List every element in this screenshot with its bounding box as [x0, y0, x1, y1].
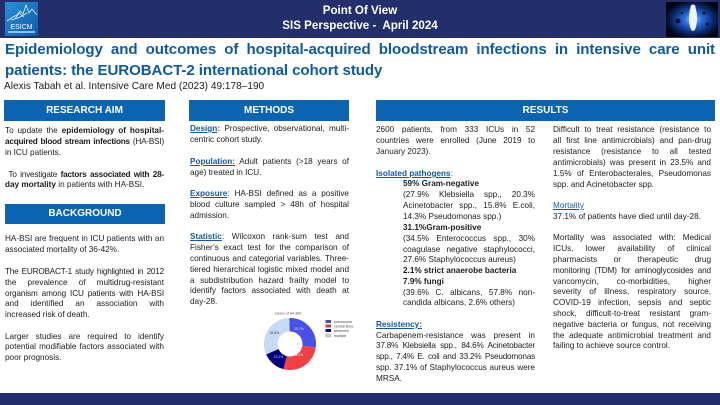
text: background: potential modifiable factors associated with	[5, 342, 164, 351]
text: results right column: 37.1% of patients have died until day-28.	[553, 212, 701, 221]
text: results left column: 37.8% Klebsiella spp., 84.6% Acinetobacter	[376, 341, 535, 350]
chart legend	[326, 320, 353, 338]
text: results left column: candida albicans, 2.6% others)	[403, 298, 515, 307]
header band	[0, 0, 720, 38]
icon: ESICM logo	[5, 2, 38, 36]
text: results right column: Mortality	[553, 201, 584, 210]
icon: glowing human figure image	[666, 2, 718, 37]
heading: background	[5, 204, 165, 224]
text: background: and identified an association with	[5, 299, 164, 308]
text: research aim: To update the epidemiology of hospital-	[5, 126, 164, 135]
heading: methods: METHODS	[244, 105, 294, 116]
text: background: increased risk of death.	[5, 310, 90, 319]
text: results left column: Carbapenem-resistance was present in	[376, 331, 535, 340]
text: results left column: January 2023).	[376, 147, 431, 156]
text: background: HA-BSI are frequent in ICU patients with an	[5, 234, 164, 243]
chart: donut source of HA-BSI: 32.8%	[270, 331, 279, 335]
text: results right column: COVID-19 infection, sepsis and septic	[553, 298, 711, 307]
header title: Point Of View	[323, 4, 397, 17]
chart: donut source of HA-BSI: 15.1%	[274, 355, 283, 359]
text: results right column: shock, difficult-to-treat resistant gram-	[553, 309, 711, 318]
text: results left column: 2.1% strict anaerobe bacteria	[403, 266, 516, 275]
text: results right column: antimicrobials) was present in 23.5% and	[553, 158, 711, 167]
text: results right column: negative bacteria or fungus, not receiving	[553, 320, 711, 329]
text: results right column: failing to achieve source control.	[553, 341, 670, 350]
text: results right column: monitoring (TDM) for aminoglycosides and	[553, 266, 711, 275]
text: results right column: vancomycin, co-morbidities, higher	[553, 277, 711, 286]
text: methods: Statistic: Wilcoxon rank-sum test and	[190, 232, 349, 241]
text: background: The EUROBACT-1 study highlighted in 2012	[5, 267, 164, 276]
text: methods: blood culture sampled > 48h of hospital	[190, 200, 349, 209]
icon: ESICM logo: ESICM	[10, 24, 33, 31]
text: methods	[190, 124, 350, 306]
text: results right column: Mortality was associated with: Medical	[553, 233, 711, 242]
text: results right column: spp. and Acinetobacter spp.	[553, 180, 654, 188]
heading: results	[376, 100, 715, 121]
text: background	[5, 234, 164, 362]
text: results left column: 31.1%Gram-positive	[403, 223, 481, 232]
text: methods: age) treated in ICU.	[190, 168, 261, 177]
text: methods: tiered hierarchical logistic mixed model and	[190, 265, 349, 274]
text: methods: continuous and categorial variables. Three-	[190, 254, 349, 263]
text: results right column: all first line antimicrobials) and pan-drug	[553, 136, 711, 145]
text: methods: Design: Prospective, observational, multi-	[190, 124, 349, 133]
text: results right column: 1.5% of Enterobacterales, Pseudomonas	[553, 169, 711, 178]
text: research aim: To investigate factors associated with 28-	[8, 170, 164, 179]
chart title: source of HA-BSI	[275, 312, 301, 316]
text: background: poor prognosis.	[5, 353, 61, 362]
text: results left column: spp., 7.4% E. coli and 33.2% Pseudomonas	[376, 352, 535, 361]
header title	[282, 4, 438, 32]
text: research aim: in ICU patients.	[5, 148, 61, 157]
text: results right column: the adequate antimicrobial treatment and	[553, 331, 711, 340]
heading: background: BACKGROUND	[48, 208, 122, 219]
text: background: Larger studies are required to identify	[5, 332, 164, 341]
text: results left column: spp. 37.1% of Staphylococcus aureus were	[376, 363, 535, 372]
chart legend: abdomen	[334, 329, 349, 333]
heading: research aim: RESEARCH AIM	[46, 105, 123, 116]
text: results right column: pharmacists or therapeutic drug	[553, 255, 711, 264]
text: results left column: 59% Gram-negative	[403, 179, 479, 188]
text: research aim: day mortality in patients with HA-BSI.	[5, 180, 144, 189]
text: results left column: (34.5% Enterococcus spp., 30%	[403, 234, 535, 243]
text: results right column	[553, 125, 711, 350]
chart: donut source of HA-BSI	[264, 312, 353, 370]
chart legend: multiple	[334, 334, 346, 338]
text: background: organism among ICU patients with HA-BSI	[5, 288, 164, 298]
chart legend: pneumonia	[334, 320, 352, 324]
heading: results: RESULTS	[523, 105, 568, 116]
text: methods: identify factors associated with death at	[190, 286, 349, 295]
text: results left column: 2600 patients, from 333 ICUs in 52	[376, 125, 535, 134]
text: background: associated mortality of 36-42%.	[5, 245, 119, 254]
text: results left column: Isolated pathogens:	[376, 169, 453, 178]
chart legend: central lines	[334, 324, 353, 328]
header title: SIS Perspective - April 2024	[282, 19, 438, 32]
text: results left column: MRSA.	[376, 374, 402, 383]
text: results left column: coagulase negative staphylococci,	[403, 245, 535, 254]
text: results right column: Difficult to treat resistance (resistance to	[553, 125, 711, 134]
chart: donut source of HA-BSI: 28.7%	[294, 327, 304, 331]
paper title	[5, 41, 715, 79]
text: methods: centric cohort study.	[190, 135, 263, 144]
text: results left column: Acinetobacter spp., 15.8% E.coli,	[403, 201, 535, 210]
heading: research aim	[4, 100, 165, 121]
text: results right column: resistance (resistance to all tested	[553, 147, 711, 156]
text: methods: admission.	[190, 211, 229, 220]
text: methods: day-28.	[190, 297, 217, 306]
text: methods: Population: Adult patients (>18 years of	[190, 157, 349, 166]
text: results left column: countries were enrolled (June 2019 to	[376, 136, 535, 145]
text: results left column	[376, 125, 536, 383]
text: research aim: acquired blood stream infections (HA-BSI)	[5, 137, 164, 146]
text: background: the prevalence of multidrug-resistant	[5, 278, 164, 287]
footer band	[0, 393, 720, 405]
text: results left column: (39.6% C. albicans, 57.8% non-	[403, 288, 535, 296]
citation: Alexis Tabah et al. Intensive Care Med (2023) 49:178–190	[4, 81, 264, 92]
heading: methods	[189, 100, 349, 121]
chart: donut source of HA-BSI: 28.4%	[294, 353, 303, 357]
paper title: Epidemiology and outcomes of hospital-acquired bloodstream infections in intensive care unit	[5, 41, 715, 58]
text: results left column: 7.9% fungi	[403, 277, 444, 286]
text: results left column: Resistency:	[376, 320, 422, 329]
text: results right column: severity of illness, respiratory source,	[553, 287, 711, 296]
text: methods: Fisher’s exact test for the comparison of	[190, 243, 349, 252]
text: results left column: 14.3% Pseudomonas spp.)	[403, 212, 501, 221]
paper title: patients: the EUROBACT-2 international cohort study	[5, 62, 382, 79]
text: results left column: 27.6% Staphylococcus aureus)	[403, 255, 516, 264]
text: methods: Exposure: HA-BSI defined as a positive	[190, 189, 349, 198]
text: research aim	[5, 126, 164, 189]
text: results left column: (27.9% Klebsiella spp., 20.3%	[403, 190, 535, 199]
text: results right column: ICUs, lower availability of clinical	[553, 244, 711, 253]
text: methods: a subdistribution hazard frailty model to	[190, 276, 349, 285]
